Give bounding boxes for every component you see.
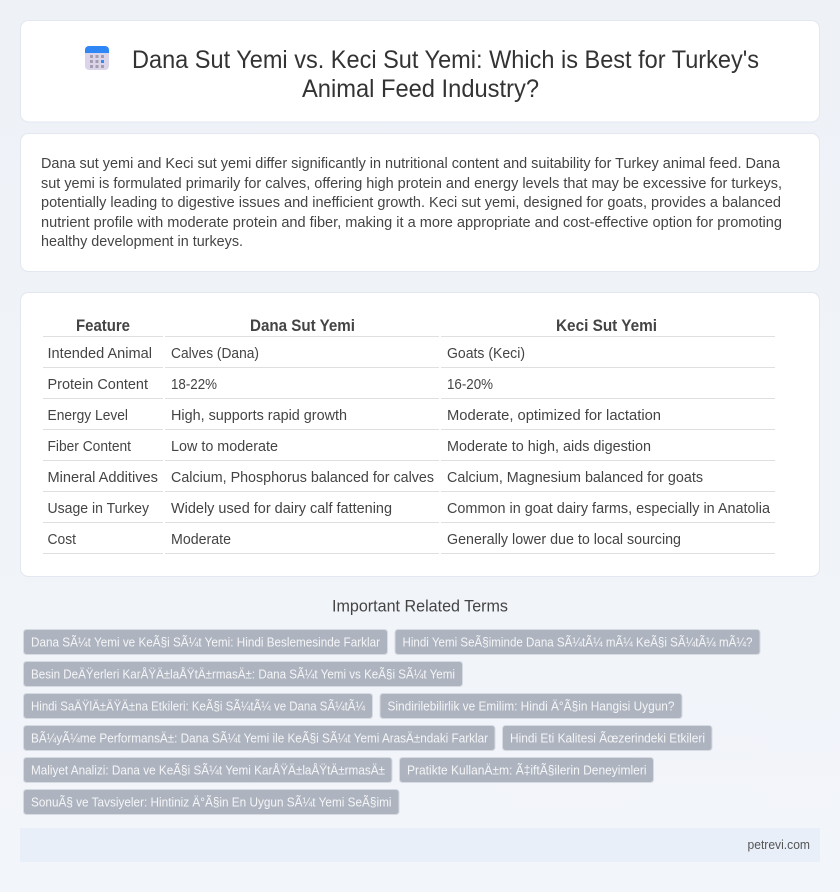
tag <box>24 662 462 686</box>
row: intended animal: Intended Animal <box>48 346 152 362</box>
tag <box>24 726 495 750</box>
panel: title header <box>20 20 820 122</box>
row: mineral additives: Mineral Additives <box>48 470 158 486</box>
row: usage in turkey: Common in goat dairy farms, especially in Anatolia <box>447 501 771 517</box>
row: cost <box>48 532 681 548</box>
panel: introduction <box>20 134 820 272</box>
row: mineral additives: Calcium, Phosphorus balanced for calves <box>171 470 434 486</box>
tag: Sindirilebilirlik ve Emilim: Hindi Ä°Ã§in Hangisi Uygun? <box>388 698 674 714</box>
row: mineral additives: Calcium, Magnesium balanced for goats <box>447 470 703 486</box>
row: cost: Generally lower due to local sourcing <box>447 532 681 548</box>
row: energy level: Energy Level <box>48 408 128 424</box>
panel: related term tags <box>24 630 760 814</box>
row: usage in turkey: Widely used for dairy calf fattening <box>171 501 392 517</box>
row: mineral additives <box>48 470 703 486</box>
row: intended animal: Calves (Dana) <box>171 346 259 362</box>
tag: Hindi Eti Kalitesi Ãœzerindeki Etkileri <box>510 730 705 746</box>
row: protein content <box>48 377 493 393</box>
tag: Hindi Yemi SeÃ§iminde Dana SÃ¼tÃ¼ mÃ¼ KeÃ§i SÃ¼tÃ¼ mÃ¼? <box>402 634 752 650</box>
table header row: Feature <box>76 317 130 335</box>
text block: introduction paragraph: healthy development in turkeys. <box>41 234 243 250</box>
tag: Pratikte KullanÄ±m: Ã‡iftÃ§ilerin Deneyimleri <box>407 762 646 778</box>
tag: SonuÃ§ ve Tavsiyeler: Hintiniz Ä°Ã§in En Uygun SÃ¼t Yemi SeÃ§imi <box>31 794 392 810</box>
tag: Besin DeÄŸerleri KarÅŸÄ±laÅŸtÄ±rmasÄ±: Dana SÃ¼t Yemi vs KeÃ§i SÃ¼t Yemi <box>31 666 455 682</box>
tag: BÃ¼yÃ¼me PerformansÄ±: Dana SÃ¼t Yemi ile KeÃ§i SÃ¼t Yemi ArasÄ±ndaki Farklar <box>31 730 489 746</box>
row: intended animal <box>48 346 525 362</box>
title: Dana Sut Yemi vs. Keci Sut Yemi: Which is Best for Turkey's <box>132 47 759 74</box>
table header row: Dana Sut Yemi <box>250 317 355 335</box>
row: usage in turkey <box>48 501 771 517</box>
icon: calendar <box>85 46 109 70</box>
footer source text: petrevi.com <box>748 838 810 852</box>
row: fiber content: Moderate to high, aids digestion <box>447 439 651 455</box>
tag <box>502 726 712 750</box>
tag: Dana SÃ¼t Yemi ve KeÃ§i SÃ¼t Yemi: Hindi Beslemesinde Farklar <box>31 634 381 650</box>
tag <box>380 694 682 718</box>
text block: introduction paragraph: sut yemi is formulated primarily for calves, offering high protein and energy levels that may be excessive for turkeys, <box>41 176 782 192</box>
text block: introduction paragraph: nutrient profile with moderate protein and fiber, making it a more appropriate and cost-effective option for promoting <box>41 215 782 231</box>
row: fiber content: Fiber Content <box>48 439 131 455</box>
row: cost: Moderate <box>171 532 231 548</box>
row: energy level <box>48 408 661 424</box>
text block: introduction paragraph: Dana sut yemi and Keci sut yemi differ significantly in nutritional content and suitability for Turkey animal feed. Dana <box>41 156 781 172</box>
row: protein content: Protein Content <box>48 377 148 393</box>
row: energy level: High, supports rapid growth <box>171 408 347 424</box>
text block: introduction paragraph <box>41 156 782 250</box>
tag <box>24 694 372 718</box>
tag <box>395 630 760 654</box>
tag <box>24 758 392 782</box>
row: fiber content <box>48 439 651 455</box>
row: fiber content: Low to moderate <box>171 439 278 455</box>
tag: Maliyet Analizi: Dana ve KeÃ§i SÃ¼t Yemi KarÅŸÄ±laÅŸtÄ±rmasÄ± <box>31 762 385 778</box>
row: protein content: 18-22% <box>171 377 217 393</box>
row: protein content: 16-20% <box>447 377 493 393</box>
row: intended animal: Goats (Keci) <box>447 346 525 362</box>
title <box>132 47 759 103</box>
row: cost: Cost <box>48 532 76 548</box>
table header row <box>76 317 657 335</box>
text block: introduction paragraph: potentially leading to digestive issues and inefficient growth. Keci sut yemi, designed for goats, provides a balanced <box>41 195 781 211</box>
title: Animal Feed Industry? <box>302 76 539 103</box>
table header row: Keci Sut Yemi <box>556 317 657 335</box>
panel: comparison table <box>20 292 820 576</box>
tag: Hindi SaÄŸlÄ±ÄŸÄ±na Etkileri: KeÃ§i SÃ¼tÃ¼ ve Dana SÃ¼tÃ¼ <box>31 698 365 714</box>
footer <box>20 828 820 862</box>
row: energy level: Moderate, optimized for lactation <box>447 408 661 424</box>
tag <box>400 758 654 782</box>
heading: important related terms: Important Related Terms <box>332 598 508 616</box>
tag <box>24 790 399 814</box>
row: usage in turkey: Usage in Turkey <box>48 501 150 517</box>
tag <box>24 630 388 654</box>
